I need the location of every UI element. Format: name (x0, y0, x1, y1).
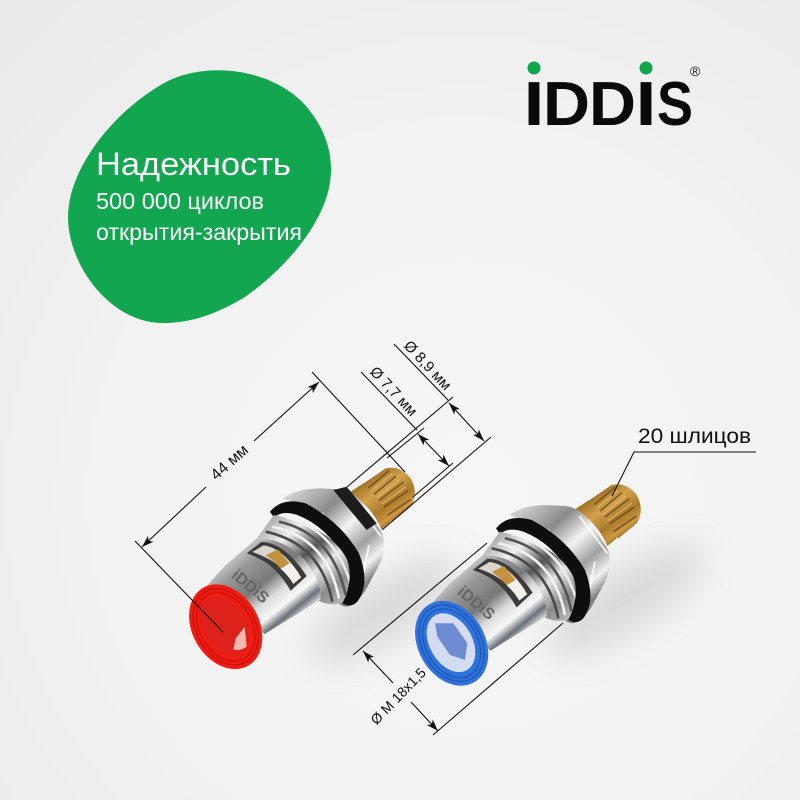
logo IDDIS: D (589, 70, 636, 139)
dimension: diameter 7.7 mm: Ø 7,7 мм (366, 363, 421, 420)
heading: reliability: Надежность (96, 146, 291, 182)
dimension: 44 mm: 44 мм (208, 442, 252, 484)
blue ring (400, 588, 503, 699)
text: cycles: 500 000 циклов (96, 188, 264, 214)
dimension: thread M18x1.5: Ø M 18x1,5 (367, 664, 429, 728)
right cartridge (blue) (400, 484, 641, 699)
dimension: diameter 8.9 mm (347, 337, 491, 530)
green blob panel (68, 70, 331, 323)
dark flange patch (333, 487, 377, 530)
engraved logo: iDDiS (228, 567, 272, 607)
dimension: 44 mm (135, 372, 405, 632)
red ring (174, 571, 277, 682)
left cartridge (red) (174, 468, 415, 682)
callout: 20 splines: 20 шлицов (638, 425, 751, 448)
text: open-close: открытия-закрытия (96, 219, 302, 245)
logo IDDIS: S (657, 70, 693, 139)
dimension: diameter 7.7 mm (361, 363, 453, 497)
logo IDDIS (524, 62, 701, 139)
callout: 20 splines (612, 425, 756, 496)
engraved logo: iDDiS (454, 583, 498, 624)
logo IDDIS: ® (690, 63, 701, 79)
logo IDDIS: D (543, 70, 590, 139)
dimension: diameter 8.9 mm: Ø 8,9 мм (400, 337, 455, 394)
dimension: thread M18x1.5 (353, 543, 563, 735)
logo IDDIS: I (524, 70, 544, 139)
logo IDDIS: I (636, 70, 656, 139)
soft shadows (297, 527, 717, 680)
